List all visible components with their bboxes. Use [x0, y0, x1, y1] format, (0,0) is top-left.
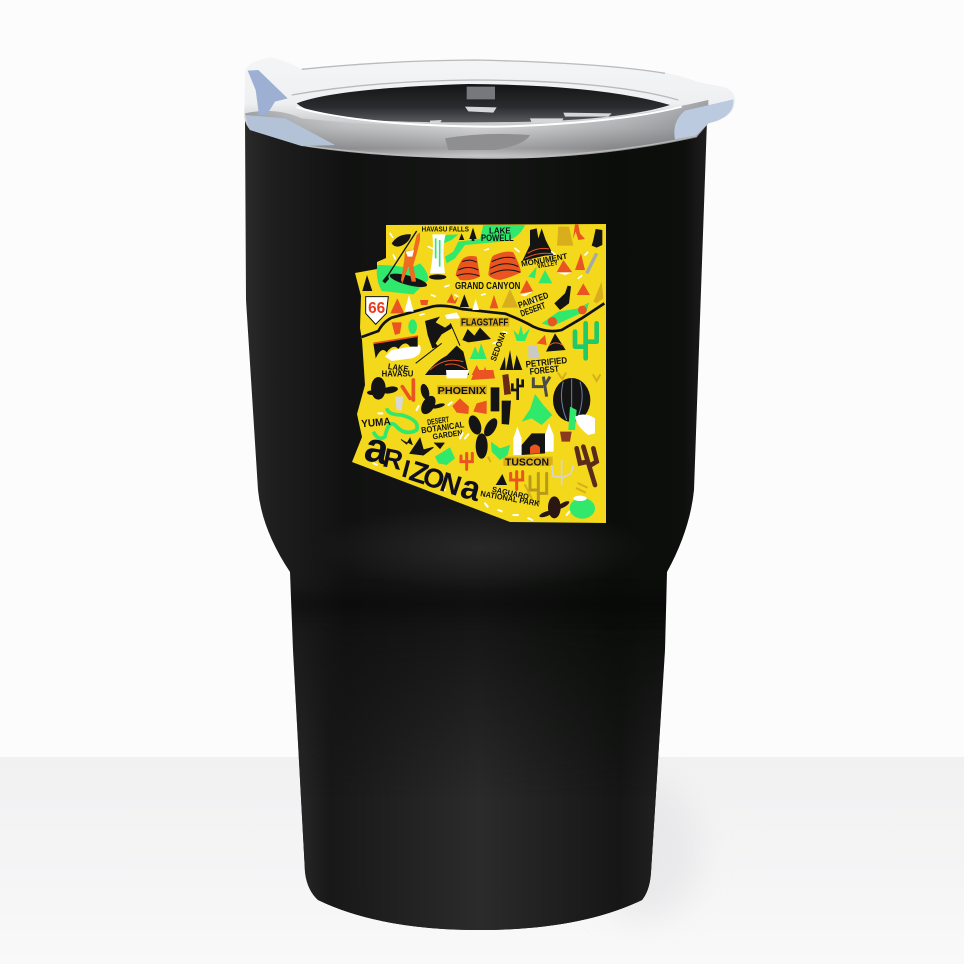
- route 66 shield: 66: [368, 300, 385, 317]
- orange rocks: [452, 398, 487, 414]
- northern illustrations: [362, 224, 604, 377]
- snake: [373, 408, 417, 438]
- waterfall: [429, 234, 446, 280]
- paddleboarder: [382, 231, 428, 290]
- lid opening: [297, 84, 670, 122]
- ochre and grey cacti: [530, 473, 547, 503]
- Lake Havasu label upper: LAKE: [387, 361, 410, 374]
- green blob cactus: [522, 394, 552, 425]
- Petrified Forest label: [525, 355, 568, 377]
- snow under mountain: [446, 370, 469, 378]
- lid lower bright line: [297, 107, 682, 127]
- Arizona title: R: [380, 442, 406, 476]
- red cactus south: [461, 453, 472, 469]
- Havasu Falls label: HAVASU FALLS: [422, 225, 469, 234]
- Phoenix label: PHOENIX: [438, 386, 486, 397]
- hiker: [416, 312, 469, 375]
- route 66 shield: [366, 297, 388, 324]
- Desert Botanical Garden label: DESERT: [427, 415, 450, 427]
- Sedona label: SEDONA: [488, 330, 508, 362]
- lid vent reflection: [467, 87, 495, 99]
- prickly pear center: [466, 414, 500, 459]
- mission church: [513, 423, 554, 455]
- vase and leaf: [392, 319, 417, 335]
- Arizona title: Z: [405, 455, 432, 491]
- Monument Valley butte: [522, 228, 553, 261]
- green barrel small: [435, 447, 455, 465]
- bridge at Lake Havasu: [373, 336, 421, 361]
- Arizona title: [361, 422, 486, 509]
- rock black: [496, 474, 507, 485]
- brown saguaro: [577, 447, 597, 485]
- agave plants black: [401, 438, 444, 455]
- green leaf cactus: [491, 442, 510, 460]
- southern illustrations: [361, 368, 600, 520]
- Grand Canyon rocks: [456, 252, 521, 280]
- Arizona title: I: [399, 455, 413, 484]
- lid outer shell: [244, 57, 735, 159]
- black stripe buildings: [491, 387, 511, 425]
- red cactus: [402, 380, 413, 400]
- lid lower left tint: [245, 115, 335, 146]
- Painted Desert label: DESERT: [519, 300, 547, 319]
- lid sip highlight: [430, 107, 612, 123]
- lid blue left tab: [248, 70, 288, 115]
- Tuscon label: TUSCON: [505, 457, 549, 468]
- brown log: [502, 374, 511, 395]
- orange cactus south: [511, 472, 523, 489]
- map outline: [352, 224, 606, 523]
- agave green: [513, 326, 530, 341]
- green car: [542, 286, 589, 327]
- green barrel cactus: [570, 496, 595, 519]
- lid blue right tab: [674, 99, 733, 139]
- table shadow: [590, 780, 700, 920]
- Arizona map artwork: [352, 224, 606, 523]
- Arizona title: a: [457, 468, 486, 509]
- Arizona title: O: [419, 461, 448, 496]
- white leaf: [395, 397, 403, 411]
- Saguaro National Park label: NATIONAL PARK: [480, 489, 541, 508]
- Flagstaff label: FLAGSTAFF: [461, 318, 508, 329]
- phoenix cactus: [418, 383, 445, 417]
- highway road: [362, 303, 604, 337]
- Lake Powell label: LAKE: [489, 226, 511, 235]
- decorative specks south: [373, 402, 569, 520]
- saguaro green cactus: [575, 323, 597, 358]
- Desert Botanical Garden label: BOTANICAL: [421, 419, 465, 435]
- lid sip ridge: [445, 134, 530, 150]
- ochre decorative marks: [488, 373, 600, 498]
- Painted Desert label: [517, 290, 550, 319]
- lid bright rim: [292, 60, 697, 157]
- Lake Powell label: POWELL: [481, 233, 514, 243]
- pine trees top: [362, 228, 477, 307]
- Monument Valley label: MONUMENT: [520, 252, 568, 269]
- Sedona rocks: [462, 328, 491, 375]
- Desert Botanical Garden label: GARDEN: [432, 428, 463, 441]
- northeast icons: [520, 224, 603, 303]
- Petrified Forest label: PETRIFIED: [525, 355, 568, 369]
- bottom prickly pear: [539, 496, 570, 519]
- Saguaro National Park label: SAGUARO: [491, 485, 530, 501]
- background wall: [0, 0, 964, 757]
- Arizona title: a: [361, 422, 394, 473]
- green river and Lake Powell: [377, 225, 525, 294]
- lid: [244, 57, 735, 159]
- tumbler body: [240, 110, 720, 940]
- petrified forest logs and hills: [500, 333, 566, 370]
- Lake Powell label: [481, 226, 514, 243]
- Petrified Forest label: FOREST: [529, 364, 560, 377]
- hot air balloon: [553, 378, 595, 442]
- small cacti: [512, 378, 523, 400]
- Yuma label: YUMA: [361, 416, 391, 430]
- Grand Canyon label: GRAND CANYON: [455, 281, 520, 292]
- Painted Desert label: PAINTED: [517, 290, 550, 310]
- grey striped cactus: [533, 377, 550, 397]
- decorative specks north: [390, 233, 588, 343]
- lid side shading: [245, 100, 708, 159]
- Lake Havasu label lower: HAVASU: [382, 368, 413, 378]
- orange rock under Sedona: [471, 370, 495, 380]
- Monument Valley label: VALLEY: [537, 260, 559, 270]
- orange and white pines: [390, 283, 590, 313]
- Desert Botanical Garden label: [421, 415, 465, 441]
- prickly pear left: [367, 377, 398, 400]
- Arizona title: N: [437, 466, 465, 502]
- table surface: [0, 757, 964, 964]
